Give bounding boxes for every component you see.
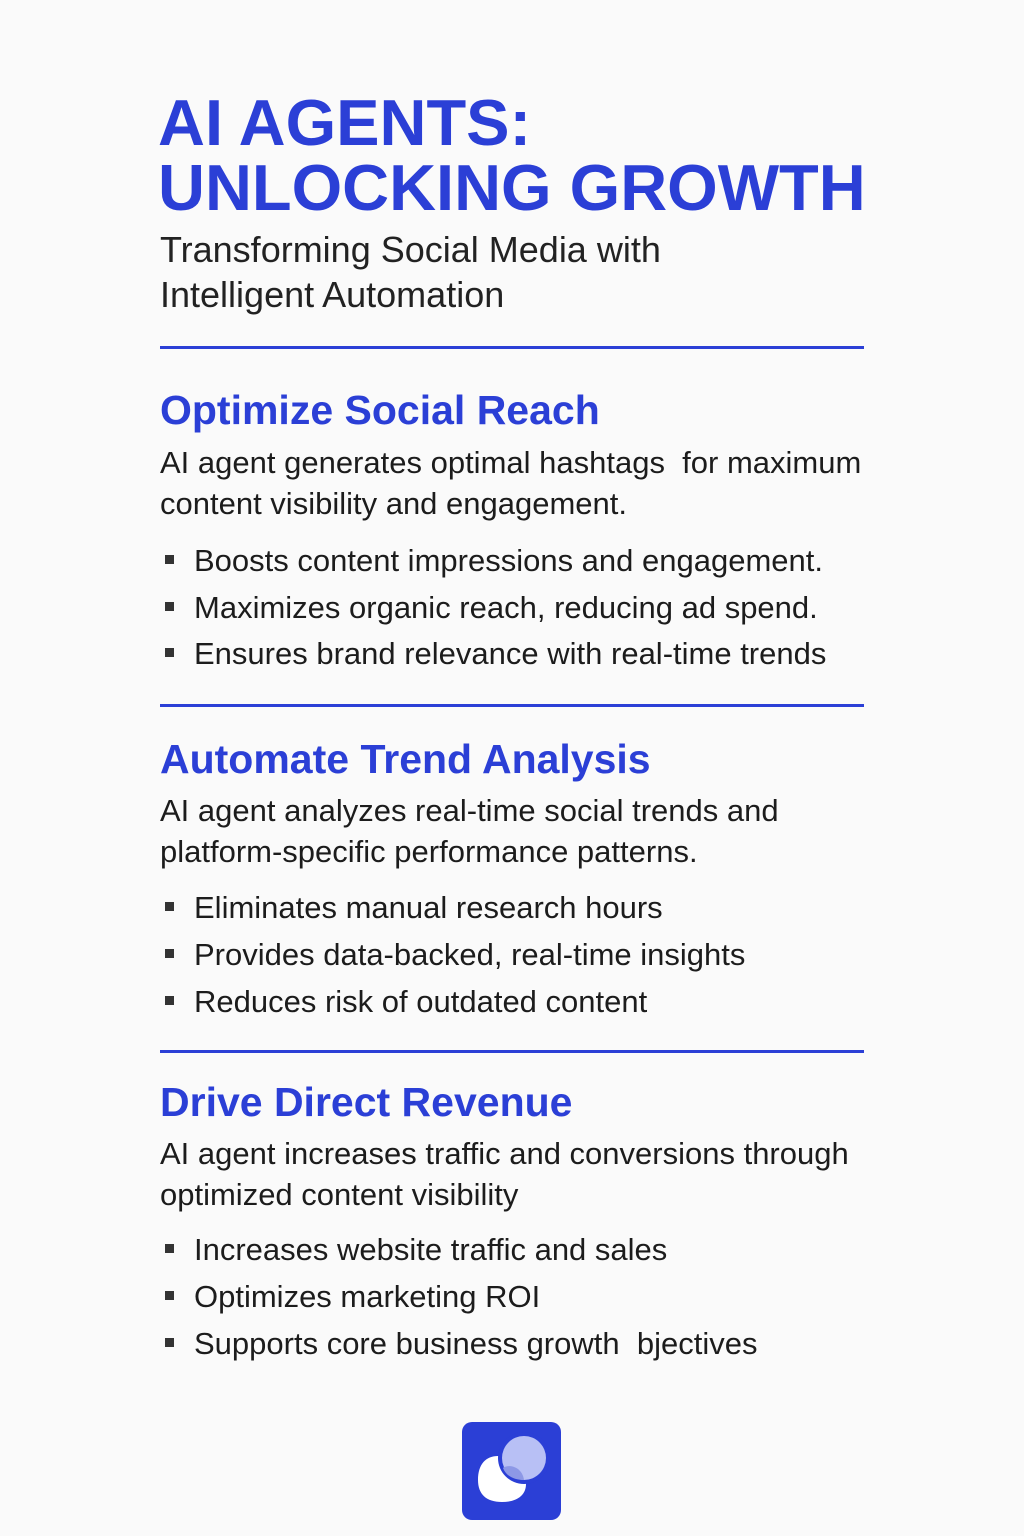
heading: optimize social reach: Optimize Social Reach	[160, 387, 600, 433]
bullets: trend: Eliminates manual research hours	[194, 890, 663, 925]
text: revenue description: AI agent increases traffic and conversions through	[160, 1136, 849, 1171]
icon: logo	[462, 1422, 561, 1520]
text: revenue description	[160, 1136, 849, 1212]
text: trend description	[160, 793, 779, 869]
bullets: trend: Reduces risk of outdated content	[194, 984, 647, 1019]
title: UNLOCKING GROWTH	[158, 151, 866, 224]
subtitle: Intelligent Automation	[160, 274, 504, 315]
subtitle: Transforming Social Media with	[160, 229, 661, 270]
title: AI AGENTS:	[158, 86, 531, 159]
bullets: revenue	[165, 1232, 757, 1361]
heading: drive direct revenue: Drive Direct Revenue	[160, 1079, 572, 1125]
bullets: trend	[165, 890, 745, 1019]
bullets: revenue: Increases website traffic and sales	[194, 1232, 667, 1267]
bullets: optimize: Boosts content impressions and engagement.	[194, 543, 823, 578]
title	[158, 86, 866, 224]
text: revenue description: optimized content visibility	[160, 1177, 518, 1212]
bullets: revenue: Optimizes marketing ROI	[194, 1279, 540, 1314]
subtitle	[160, 229, 661, 315]
text: trend description: AI agent analyzes real-time social trends and	[160, 793, 779, 828]
text: trend description: platform-specific performance patterns.	[160, 834, 698, 869]
text: optimize description: content visibility and engagement.	[160, 486, 627, 521]
bullets: optimize: Ensures brand relevance with real-time trends	[194, 636, 826, 671]
text: optimize description	[160, 445, 861, 521]
bullets: optimize: Maximizes organic reach, reducing ad spend.	[194, 590, 818, 625]
heading: automate trend analysis: Automate Trend Analysis	[160, 736, 651, 782]
bullets: optimize	[165, 543, 826, 671]
text: optimize description: AI agent generates optimal hashtags for maximum	[160, 445, 861, 480]
bullets: revenue: Supports core business growth bjectives	[194, 1326, 757, 1361]
bullets: trend: Provides data-backed, real-time insights	[194, 937, 745, 972]
